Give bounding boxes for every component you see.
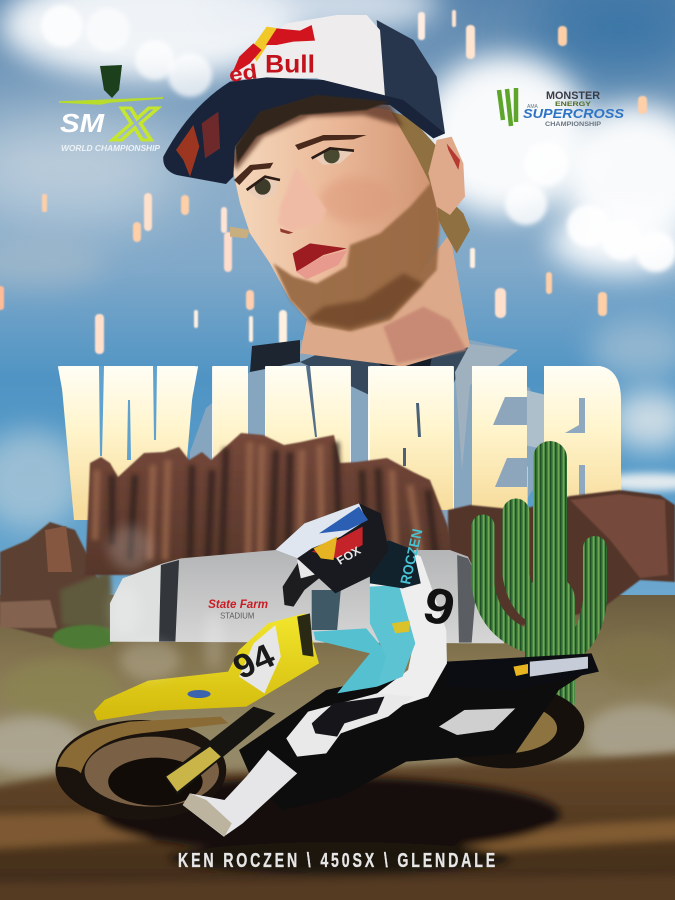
bush — [53, 625, 117, 649]
rider teal sleeve — [314, 628, 395, 693]
Monster Energy AMA Supercross logo: MONSTER — [546, 90, 600, 102]
WINNER headline: W — [69, 342, 187, 536]
cap — [163, 15, 445, 184]
caption: KEN ROCZEN \ 450SX \ GLENDALE — [178, 850, 498, 872]
WINNER headline: N — [265, 340, 351, 535]
mountains — [0, 433, 675, 640]
mouth — [293, 243, 347, 279]
Monster Energy AMA Supercross logo: ENERGY — [555, 101, 592, 108]
helmet — [275, 503, 389, 593]
forehead shadow — [230, 93, 403, 170]
helmet: FOX — [334, 544, 363, 567]
swingarm number — [439, 708, 515, 735]
bill logo — [176, 125, 199, 177]
face — [230, 100, 440, 333]
WINNER headline — [60, 340, 621, 536]
desert ground — [0, 595, 675, 855]
rear fender — [446, 653, 599, 690]
jersey: 9 — [418, 577, 460, 637]
Monster Energy AMA Supercross logo: AMA — [527, 104, 538, 110]
hair — [383, 110, 470, 253]
Monster claw icon — [499, 88, 516, 126]
letter body fill — [60, 366, 621, 520]
eyes — [247, 147, 354, 200]
rear wheel — [432, 685, 584, 768]
fork — [165, 707, 275, 795]
SMX World Championship logo: WORLD CHAMPIONSHIP — [61, 144, 161, 153]
glove and handlebar — [283, 558, 321, 607]
WINNER headline: R — [546, 341, 618, 536]
neck — [300, 233, 470, 367]
Monster Energy AMA Supercross logo — [499, 88, 624, 128]
pants — [286, 693, 414, 757]
smoke wisps — [108, 526, 224, 680]
dirt bike and rider — [55, 503, 599, 837]
boot — [183, 750, 297, 837]
WINNER headline: N — [368, 340, 454, 535]
nose — [278, 167, 327, 232]
cap logo: Bull — [265, 51, 315, 79]
mesa rock strata — [95, 442, 436, 560]
left hills — [0, 522, 110, 640]
jacket — [190, 340, 548, 540]
eyebrows — [234, 135, 367, 185]
jersey: ROCZEN — [397, 527, 426, 586]
beard — [273, 180, 440, 332]
State Farm Stadium: State Farm — [208, 597, 268, 611]
cheek flush — [320, 177, 393, 223]
WINNER headline: I — [212, 342, 248, 536]
SMX World Championship logo: SM — [60, 108, 106, 138]
Monster Energy AMA Supercross logo: SUPERCROSS — [523, 106, 624, 121]
SMX World Championship logo: X — [112, 99, 159, 150]
cap logo: ed — [227, 60, 259, 87]
saguaro cactus — [483, 458, 595, 700]
WINNER headline: E — [473, 341, 525, 535]
clouds and bokeh lights — [0, 0, 675, 530]
State Farm Stadium: STADIUM — [220, 611, 254, 621]
jersey — [334, 527, 460, 713]
bike frame — [239, 663, 595, 810]
dirt track — [0, 750, 675, 900]
State Farm Stadium — [110, 550, 504, 643]
ear — [428, 137, 465, 215]
letter slits — [99, 366, 585, 495]
Monster Energy AMA Supercross logo: CHAMPIONSHIP — [545, 122, 601, 128]
front fender and shroud: 94 — [227, 637, 281, 686]
front wheel — [55, 717, 228, 820]
falling sparks — [0, 10, 647, 470]
front fender and shroud — [94, 613, 319, 721]
rider portrait — [163, 15, 548, 540]
right massif — [448, 490, 675, 640]
stadium layer group — [110, 550, 504, 643]
cap logo — [227, 25, 315, 87]
Monster claw icon — [100, 65, 122, 98]
SMX World Championship logo — [59, 65, 163, 153]
main mesa — [85, 433, 453, 575]
grass haze — [0, 635, 675, 773]
